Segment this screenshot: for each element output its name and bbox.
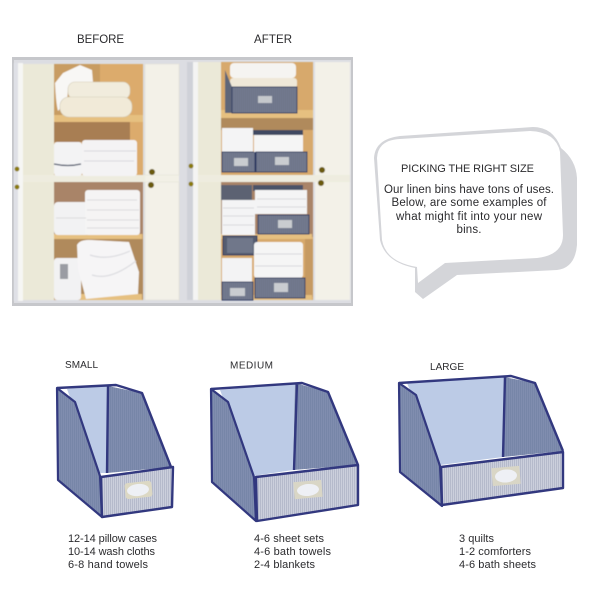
list: small bin contents: 10-14 wash cloths xyxy=(68,546,156,558)
bin: small xyxy=(57,385,173,517)
callout body text: Below, are some examples of xyxy=(392,197,547,209)
photo: before cabinet xyxy=(14,63,179,301)
label: large: LARGE xyxy=(430,362,464,373)
bin: medium xyxy=(211,383,358,521)
list: large bin contents: 1-2 comforters xyxy=(459,546,532,558)
list: large bin contents xyxy=(459,533,536,571)
list: medium bin contents xyxy=(254,533,332,571)
callout body text: Our linen bins have tons of uses. xyxy=(384,184,554,196)
callout: speech bubble xyxy=(374,127,577,299)
list: large bin contents: 3 quilts xyxy=(459,533,494,545)
heading: before: BEFORE xyxy=(77,34,124,46)
label: medium: MEDIUM xyxy=(230,360,273,372)
callout body text xyxy=(384,184,554,236)
callout heading: PICKING THE RIGHT SIZE xyxy=(401,163,534,175)
list: small bin contents: 12-14 pillow cases xyxy=(68,533,158,545)
callout body text: bins. xyxy=(456,224,482,236)
photo: after cabinet xyxy=(187,62,350,300)
list: medium bin contents: 2-4 blankets xyxy=(254,559,316,571)
heading: after: AFTER xyxy=(254,34,292,46)
bin: large xyxy=(399,376,563,506)
list: large bin contents: 4-6 bath sheets xyxy=(459,559,536,571)
callout body text: what might fit into your new xyxy=(395,211,543,223)
panel: cabinet photos xyxy=(12,57,353,306)
label: small: SMALL xyxy=(65,360,98,371)
list: small bin contents xyxy=(68,533,158,571)
list: small bin contents: 6-8 hand towels xyxy=(68,559,148,571)
list: medium bin contents: 4-6 bath towels xyxy=(254,546,332,558)
list: medium bin contents: 4-6 sheet sets xyxy=(254,533,324,545)
